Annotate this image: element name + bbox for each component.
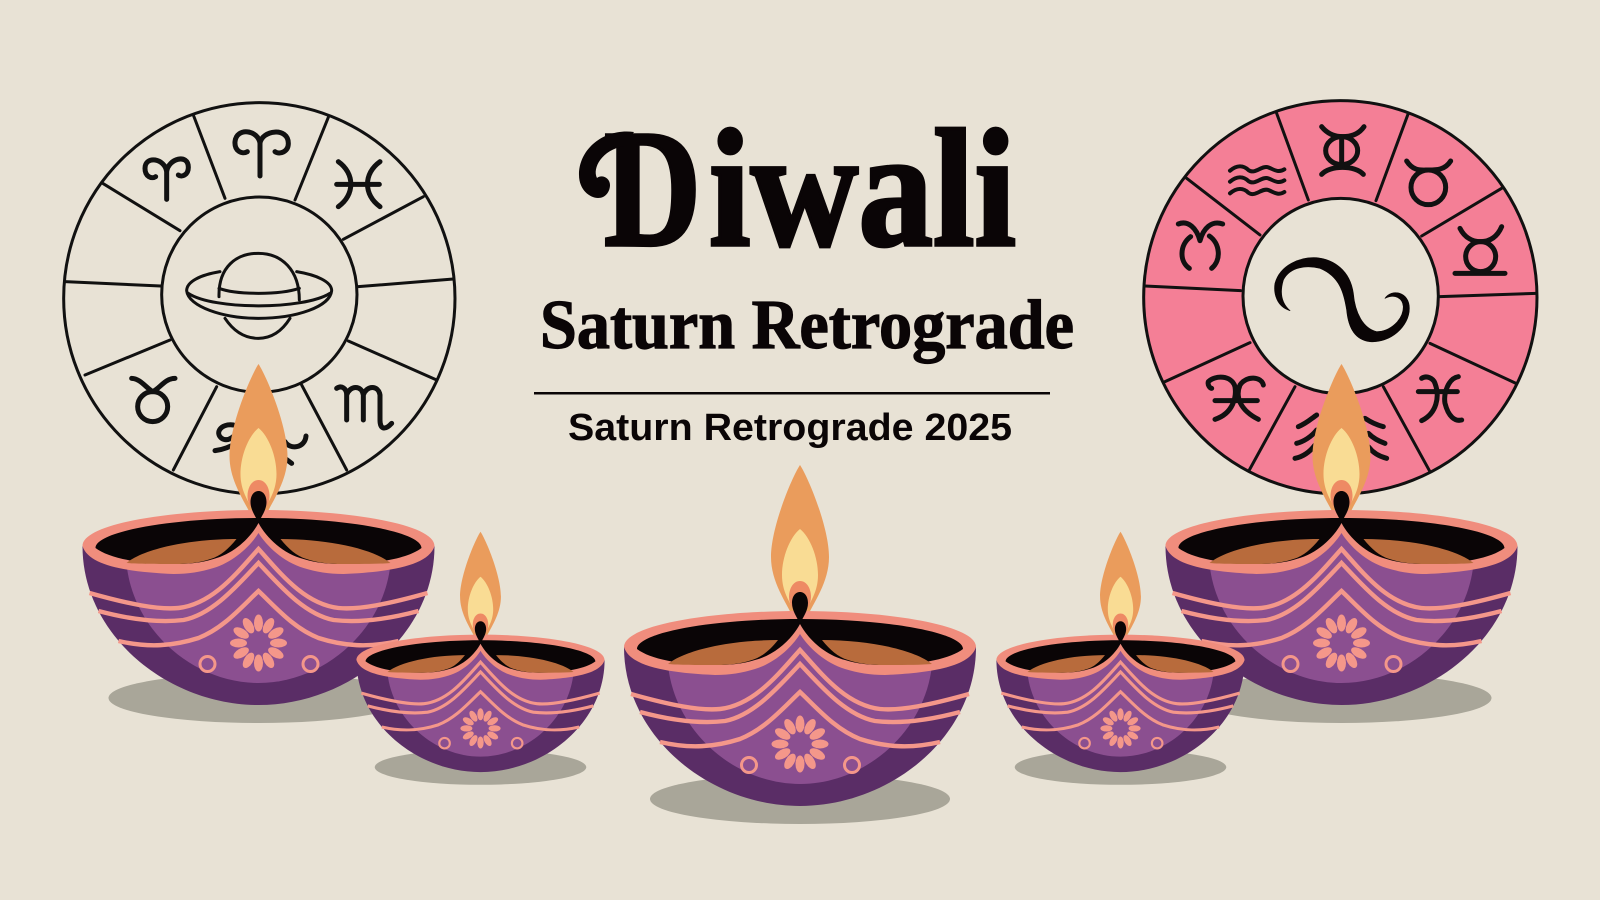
zodiac wheel: left outline with Saturn [64, 103, 455, 494]
diya lamp: large right [1166, 364, 1518, 723]
title: iwali [709, 96, 1016, 282]
heading: Saturn Retrograde [540, 287, 1074, 364]
diya lamp: centre [624, 465, 976, 824]
diya lamp: small right [996, 532, 1245, 785]
icon: zodiac signs [132, 132, 392, 463]
subtitle: Saturn Retrograde 2025 [568, 407, 1012, 449]
diya lamp: small left [356, 532, 605, 785]
diya lamp: large left [82, 364, 434, 723]
icon: zodiac signs [1178, 127, 1505, 458]
divider rule [534, 392, 1050, 394]
icon: title D swash [579, 131, 634, 198]
icon: Saturn [187, 253, 332, 338]
icon: central swirl [1275, 258, 1409, 342]
title: D [604, 96, 701, 282]
zodiac wheel: right pink with swirl [1144, 101, 1537, 494]
